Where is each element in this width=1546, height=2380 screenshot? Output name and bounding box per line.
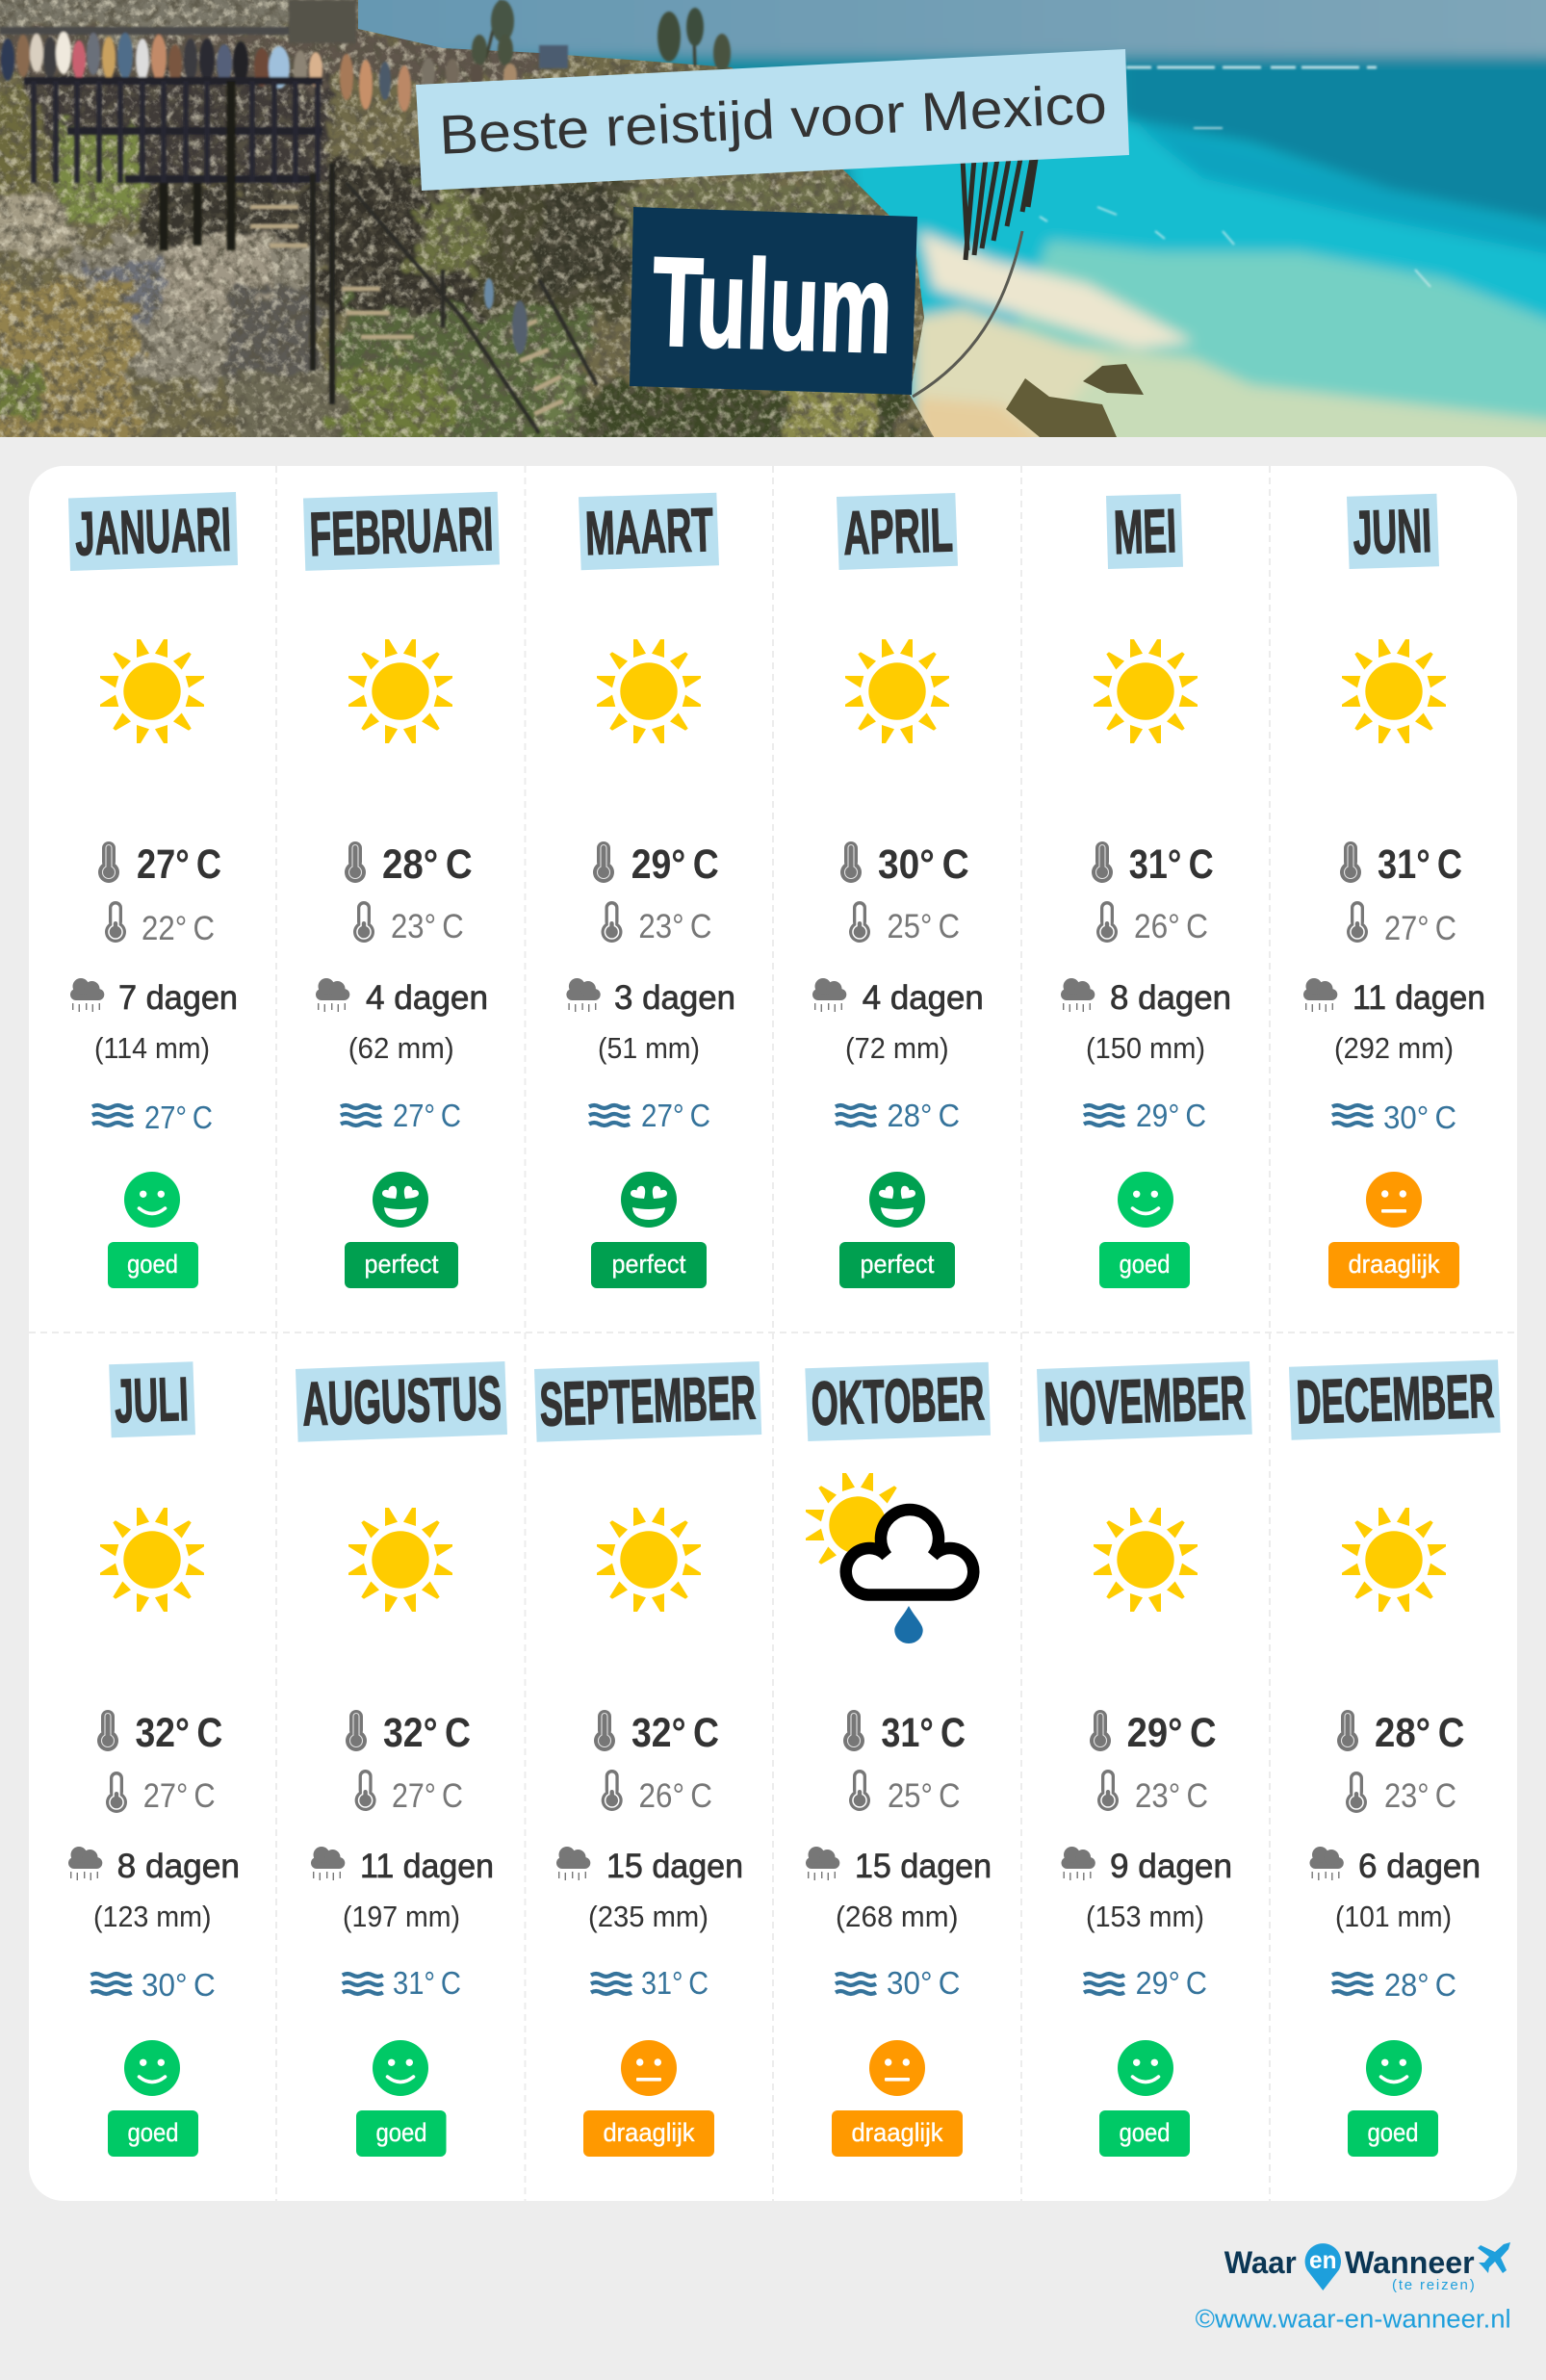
month label: JANUARI (74, 494, 232, 569)
rating badge (583, 2110, 714, 2157)
max temperature: 32° C (135, 1710, 222, 1756)
max temperature (97, 1710, 222, 1756)
sea temperature: 29° C (1136, 1098, 1206, 1133)
rain days (1061, 978, 1231, 1017)
min temperature: 23° C (638, 908, 711, 945)
rating badge (1099, 1242, 1190, 1288)
logo: Waar en Wanneer: Waar (1224, 2245, 1297, 2280)
panel: juli (68, 1361, 240, 2157)
rating badge (1328, 1242, 1459, 1288)
max temperature: 31° C (1129, 841, 1214, 888)
month label: FEBRUARI (309, 494, 494, 569)
min temperature (105, 901, 215, 947)
month label (579, 493, 719, 570)
sea temperature (589, 1098, 710, 1133)
icon: rating face (124, 2040, 180, 2096)
panel: juni (1303, 494, 1485, 1288)
max temperature: 31° C (881, 1710, 966, 1756)
month label: JULI (114, 1364, 190, 1436)
max temperature (98, 841, 221, 888)
month label: APRIL (842, 495, 954, 568)
rating badge (832, 2110, 963, 2157)
icon: rating face (1118, 1172, 1173, 1228)
rainfall: (235 mm) (588, 1900, 709, 1933)
icon: sun (597, 639, 701, 743)
max temperature (345, 841, 473, 888)
month label: MAART (584, 495, 714, 568)
rain days (1061, 1847, 1232, 1885)
sea temperature (591, 1965, 709, 2001)
month label (296, 1361, 507, 1442)
icon: airplane (1478, 2242, 1510, 2273)
min temperature (849, 1770, 961, 1815)
icon: rating face (1366, 1172, 1422, 1228)
icon: rating face (1366, 2040, 1422, 2096)
rainfall: (153 mm) (1086, 1900, 1204, 1933)
sea temperature (1084, 1098, 1206, 1133)
panel: maart (566, 493, 735, 1288)
rating badge (108, 2110, 198, 2157)
destination banner: Tulum (651, 230, 894, 379)
max temperature (1090, 1710, 1217, 1756)
logo: Waar en Wanneer: en (1309, 2247, 1336, 2274)
max temperature (1340, 841, 1462, 888)
rainfall: (101 mm) (1335, 1900, 1452, 1933)
max temperature: 30° C (878, 841, 969, 888)
rating badge: goed (1367, 2118, 1419, 2147)
sea temperature: 28° C (1384, 1967, 1456, 2003)
month label (303, 492, 500, 571)
rainfall: (72 mm) (845, 1031, 949, 1065)
min temperature: 23° C (391, 908, 464, 945)
min temperature (355, 1770, 463, 1815)
rating badge: goed (127, 2118, 179, 2147)
max temperature: 32° C (631, 1710, 719, 1756)
icon: sun (1094, 1508, 1198, 1612)
rain days (566, 978, 735, 1017)
panel: mei (1061, 494, 1231, 1288)
sea temperature: 28° C (888, 1098, 960, 1133)
rating badge (591, 1242, 707, 1288)
min temperature (1346, 1772, 1456, 1815)
min temperature: 25° C (888, 1777, 961, 1815)
month label (837, 493, 958, 570)
icon: map pin (1305, 2243, 1341, 2290)
month label: AUGUSTUS (301, 1363, 502, 1438)
icon: sun (348, 639, 452, 743)
rain days (311, 1847, 494, 1885)
panel: month grid (29, 466, 1517, 2201)
month label: OKTOBER (811, 1363, 986, 1438)
rating badge (1099, 2110, 1190, 2157)
min temperature: 22° C (142, 910, 215, 947)
month label (1037, 1361, 1252, 1442)
min temperature: 25° C (888, 908, 960, 945)
rain days (556, 1847, 743, 1885)
rating badge: draaglijk (851, 2118, 943, 2147)
month label (1106, 494, 1183, 569)
icon: sun (845, 639, 949, 743)
max temperature (593, 841, 719, 888)
icon: sun (1342, 639, 1446, 743)
rain days: 15 dagen (606, 1848, 743, 1885)
icon: sun (597, 1508, 701, 1612)
max temperature: 32° C (383, 1710, 471, 1756)
month label (68, 492, 238, 571)
min temperature: 27° C (1384, 910, 1456, 947)
sea temperature: 30° C (142, 1967, 216, 2003)
copyright link: ©www.waar-en-wanneer.nl (1196, 2305, 1511, 2334)
destination banner (630, 207, 917, 395)
max temperature: 29° C (1127, 1710, 1217, 1756)
sea temperature (341, 1098, 461, 1133)
rating badge: perfect (861, 1250, 935, 1279)
sea temperature (343, 1965, 461, 2001)
rain days (1309, 1847, 1481, 1885)
month label (534, 1361, 761, 1442)
min temperature (1347, 901, 1456, 947)
icon: rating face (373, 1172, 428, 1228)
max temperature (346, 1710, 471, 1756)
logo: Waar en Wanneer: (te reizen) (1392, 2277, 1475, 2293)
month label: NOVEMBER (1043, 1363, 1247, 1438)
icon: sun (100, 1508, 204, 1612)
rating badge (108, 1242, 198, 1288)
sea temperature (1332, 1967, 1456, 2003)
rain days: 8 dagen (117, 1848, 240, 1885)
rain days: 9 dagen (1110, 1848, 1232, 1885)
panel: januari (68, 492, 238, 1288)
sea temperature (836, 1098, 960, 1133)
rating badge (1348, 2110, 1438, 2157)
min temperature: 27° C (143, 1777, 216, 1815)
icon: rating face (621, 1172, 677, 1228)
panel: augustus (296, 1361, 507, 2157)
rating badge (839, 1242, 955, 1288)
panel: april (812, 493, 984, 1288)
hero photo: Tulum coast (0, 0, 1546, 481)
month label: JUNI (1352, 496, 1432, 567)
min temperature: 23° C (1135, 1777, 1208, 1815)
icon: sun (100, 639, 204, 743)
icon: sun (1342, 1508, 1446, 1612)
icon: rating face (621, 2040, 677, 2096)
rain days (68, 1847, 240, 1885)
icon: sun behind rain cloud (806, 1473, 973, 1643)
sea temperature: 31° C (641, 1965, 709, 2001)
min temperature (1097, 1770, 1208, 1815)
icon: rating face (869, 1172, 925, 1228)
month label: SEPTEMBER (538, 1362, 757, 1439)
min temperature (106, 1772, 216, 1815)
max temperature: 31° C (1378, 841, 1462, 888)
rating badge: perfect (364, 1250, 439, 1279)
rain days: 11 dagen (360, 1848, 494, 1885)
icon: sun (1094, 639, 1198, 743)
rain days: 8 dagen (1110, 979, 1231, 1017)
logo: Waar en Wanneer: Wanneer (1345, 2245, 1475, 2280)
rain days: 7 dagen (118, 979, 238, 1017)
rating badge (356, 2110, 447, 2157)
max temperature: 28° C (382, 841, 473, 888)
rainfall: (51 mm) (598, 1031, 700, 1065)
title banner (416, 49, 1129, 191)
sea temperature: 27° C (144, 1099, 213, 1135)
rain days: 15 dagen (855, 1848, 992, 1885)
min temperature: 26° C (639, 1777, 712, 1815)
month label (109, 1361, 195, 1437)
max temperature (840, 841, 969, 888)
icon: rating face (124, 1172, 180, 1228)
min temperature: 23° C (1384, 1777, 1456, 1815)
sea temperature (91, 1967, 216, 2003)
rating badge: draaglijk (1348, 1250, 1440, 1279)
rainfall: (62 mm) (348, 1031, 454, 1065)
rain days: 4 dagen (366, 979, 488, 1017)
sea temperature (92, 1099, 213, 1135)
sea temperature: 31° C (393, 1965, 461, 2001)
rain days: 11 dagen (1353, 979, 1485, 1017)
rainfall: (123 mm) (93, 1900, 212, 1933)
sea temperature: 30° C (887, 1965, 961, 2001)
max temperature (1337, 1710, 1464, 1756)
rating badge: perfect (612, 1250, 686, 1279)
rating badge (345, 1242, 458, 1288)
rainfall: (197 mm) (343, 1900, 460, 1933)
sea temperature (1332, 1099, 1456, 1135)
logo: Waar en Wanneer (1224, 2242, 1510, 2293)
rainfall: (268 mm) (836, 1900, 959, 1933)
max temperature: 29° C (631, 841, 719, 888)
month label: MEI (1113, 496, 1177, 567)
sea temperature (836, 1965, 961, 2001)
max temperature (1092, 841, 1214, 888)
rainfall: (150 mm) (1086, 1031, 1205, 1065)
sea temperature: 29° C (1136, 1965, 1207, 2001)
rating badge: draaglijk (603, 2118, 695, 2147)
min temperature: 26° C (1134, 908, 1208, 945)
panel: september (534, 1361, 761, 2157)
title banner: Beste reistijd voor Mexico (438, 73, 1108, 167)
icon: rating face (1118, 2040, 1173, 2096)
max temperature: 28° C (1375, 1710, 1464, 1756)
month label (1347, 494, 1439, 569)
rainfall: (114 mm) (94, 1031, 210, 1065)
panel: februari (303, 492, 500, 1288)
panel: november (1037, 1361, 1252, 2157)
max temperature: 27° C (137, 841, 221, 888)
rain days: 6 dagen (1358, 1848, 1481, 1885)
icon: sun (348, 1508, 452, 1612)
sea temperature (1084, 1965, 1207, 2001)
min temperature (602, 1770, 712, 1815)
icon: rating face (869, 2040, 925, 2096)
rain days (1303, 978, 1485, 1017)
min temperature (1096, 901, 1208, 945)
rain days: 3 dagen (614, 979, 735, 1017)
sea temperature: 27° C (641, 1098, 710, 1133)
rain days: 4 dagen (863, 979, 984, 1017)
rain days (812, 978, 984, 1017)
rain days (316, 978, 488, 1017)
rating badge: goed (1119, 2118, 1171, 2147)
month label (805, 1362, 991, 1441)
min temperature: 27° C (392, 1777, 463, 1815)
rating badge: goed (375, 2118, 427, 2147)
panel: december (1289, 1359, 1501, 2157)
max temperature (843, 1710, 966, 1756)
min temperature (601, 901, 711, 945)
panel: oktober (805, 1362, 992, 2157)
rain days (70, 978, 238, 1017)
sea temperature: 27° C (393, 1098, 461, 1133)
min temperature (849, 901, 960, 945)
rating badge: goed (127, 1250, 178, 1279)
icon: rating face (373, 2040, 428, 2096)
min temperature (353, 901, 464, 945)
max temperature (594, 1710, 719, 1756)
rainfall: (292 mm) (1334, 1031, 1454, 1065)
sea temperature: 30° C (1383, 1099, 1456, 1135)
rating badge: goed (1119, 1250, 1171, 1279)
